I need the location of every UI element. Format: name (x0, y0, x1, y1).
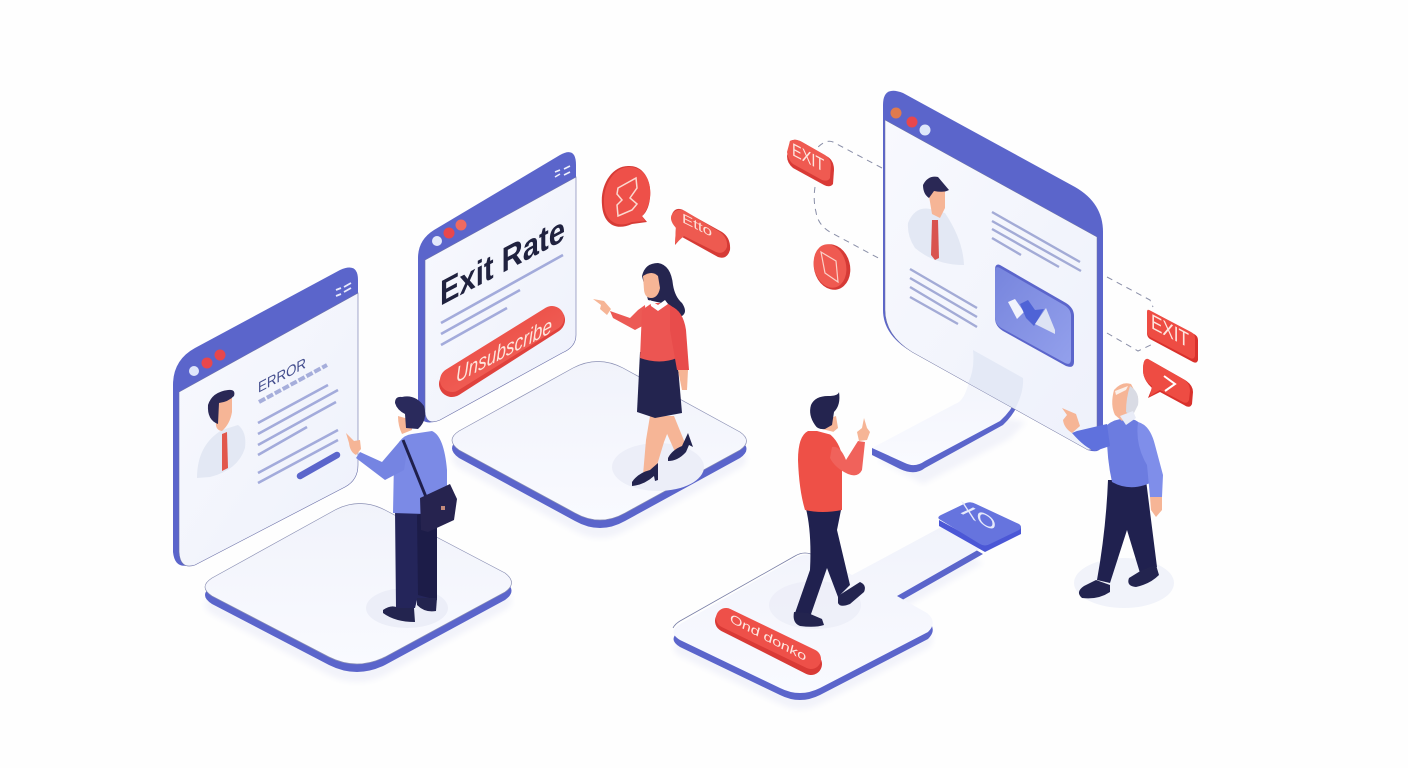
shoes (383, 598, 437, 622)
hand (1062, 408, 1080, 433)
shadow of man (769, 581, 861, 629)
icon: round red bubble (602, 166, 650, 227)
skirt (637, 352, 682, 418)
icon: red error bubble (671, 209, 730, 258)
window controls (890, 108, 930, 136)
arm with hand (610, 305, 646, 330)
person: man with bag (346, 396, 457, 622)
hand (346, 433, 361, 455)
stand seen through screen (968, 350, 1023, 409)
person: woman pointing (593, 263, 693, 486)
panel: exit rate browser window (418, 152, 576, 422)
bag (420, 484, 457, 532)
sweater (1107, 419, 1152, 487)
collar (650, 300, 668, 311)
tag: exit left: EXIT (792, 139, 824, 176)
face (643, 273, 660, 298)
person: man in red (794, 392, 870, 627)
panel: left browser window (173, 268, 358, 566)
legs (643, 416, 685, 475)
right sleeve (1137, 422, 1163, 497)
trousers (395, 508, 437, 608)
shoes (1079, 565, 1159, 598)
platform: bottom with tab (673, 498, 1021, 709)
text lines (258, 385, 338, 483)
hair back (642, 263, 685, 316)
shoes (632, 433, 693, 486)
sweater (798, 431, 842, 512)
unsubscribe button (452, 312, 552, 388)
error heading: ERROR (258, 355, 306, 397)
button (300, 455, 337, 476)
neck and face (822, 416, 838, 433)
hair (1126, 386, 1138, 417)
text lines (910, 212, 1081, 327)
image glyph (1008, 299, 1055, 334)
bag strap (403, 440, 426, 497)
icon: red circle left (809, 240, 855, 294)
icon: red error bubble: Etto (682, 211, 712, 240)
window controls (432, 220, 466, 246)
collar (1120, 411, 1136, 425)
tag: exit right: EXIT (1151, 309, 1189, 353)
platform: left (205, 504, 512, 682)
placeholder word row (259, 365, 327, 402)
titlebar glyph (555, 166, 570, 177)
pointing arm (356, 441, 408, 480)
sleeve (830, 441, 865, 475)
head (1112, 383, 1138, 421)
person: older man (1062, 383, 1174, 608)
platform: middle (452, 362, 746, 538)
titlebar glyph (336, 283, 351, 296)
pointing arm (1072, 424, 1110, 451)
blue tab (938, 498, 1021, 552)
dashed connectors (814, 141, 1155, 351)
blue tab: XO (960, 498, 996, 536)
avatar (197, 390, 245, 478)
text lines (441, 255, 563, 345)
shoes (794, 582, 865, 627)
bubble: chevron right (1143, 359, 1193, 407)
sweater (640, 303, 677, 362)
hair (810, 392, 839, 429)
right hand (678, 370, 688, 390)
image card (995, 265, 1074, 367)
trousers (795, 505, 850, 617)
tag: exit left (787, 139, 834, 186)
heading: exit rate: Exit Rate (440, 208, 565, 313)
window controls (189, 350, 226, 376)
shirt (393, 431, 447, 514)
unsubscribe button: Unsubscribe (456, 312, 552, 388)
shadow (1074, 558, 1174, 608)
right hand (1150, 497, 1162, 517)
trousers (1097, 480, 1157, 583)
panel: large monitor window (883, 91, 1103, 451)
red pill button (726, 610, 811, 665)
red pill button: Ond donko (730, 610, 806, 665)
avatar (908, 177, 964, 265)
face and hair (398, 416, 412, 434)
hand (857, 418, 870, 441)
monitor stand (872, 350, 1026, 484)
